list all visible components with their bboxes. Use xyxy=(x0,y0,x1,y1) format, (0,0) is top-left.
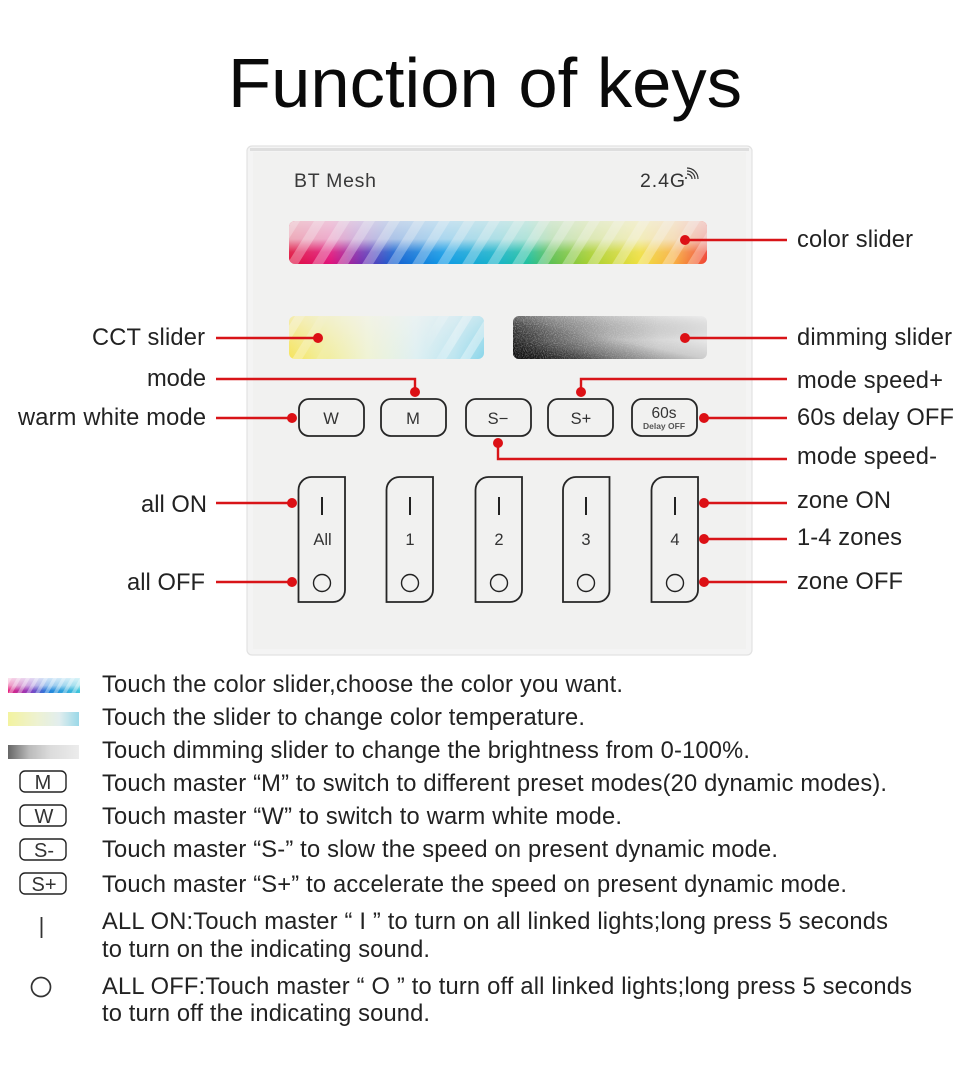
callout: CCT slider: CCT slider xyxy=(92,325,205,351)
legend: W key xyxy=(20,805,66,828)
zone key: 2 xyxy=(476,477,522,602)
legend: S+ key xyxy=(20,873,66,896)
callout: mode: mode xyxy=(147,366,206,392)
legend text: S+: Touch master “S+” to accelerate the speed on present dynamic mode. xyxy=(102,872,847,898)
legend: I symbol xyxy=(40,917,42,938)
legend: M key xyxy=(20,771,66,794)
callout: mode speed+: mode speed+ xyxy=(797,368,943,394)
legend: O symbol xyxy=(32,978,50,996)
callout: color slider: color slider xyxy=(797,227,913,253)
zone key: 4 xyxy=(652,477,698,602)
legend text: all off: to turn off the indicating sound. xyxy=(102,1001,430,1027)
legend: W key: W xyxy=(35,806,54,828)
legend: color slider swatch xyxy=(8,678,80,693)
zone key: 2: 2 xyxy=(494,531,504,549)
callout: 60s delay OFF xyxy=(699,405,954,431)
key: S-: S− xyxy=(488,410,508,428)
zone key: 3: 3 xyxy=(581,531,591,549)
callout: 60s delay OFF: 60s delay OFF xyxy=(797,405,954,431)
callout: 1-4 zones xyxy=(699,525,902,551)
callout: zone ON xyxy=(699,488,891,514)
zone key: 1: 1 xyxy=(405,531,415,549)
callout: mode speed-: mode speed- xyxy=(797,444,937,470)
legend: S- key xyxy=(20,839,66,862)
callout: 1-4 zones: 1-4 zones xyxy=(797,525,902,551)
legend text: all off: ALL OFF:Touch master “ O ” to turn off all linked lights;long press 5 seconds xyxy=(102,974,912,1000)
CCT slider xyxy=(289,316,484,359)
dimming slider xyxy=(513,316,707,359)
callout: dimming slider: dimming slider xyxy=(797,325,952,351)
callout: color slider xyxy=(680,227,913,253)
panel: wall controller xyxy=(247,146,752,655)
key: W xyxy=(299,399,364,436)
legend: S+ key: S+ xyxy=(31,874,57,896)
key: S+ xyxy=(548,399,613,436)
key: S+: S+ xyxy=(571,410,591,428)
zone key: 4: 4 xyxy=(670,531,680,549)
legend text: S-: Touch master “S-” to slow the speed on present dynamic mode. xyxy=(102,837,778,863)
zone key: 1 xyxy=(386,477,433,602)
callout: all ON xyxy=(141,492,297,518)
legend text: dimming: Touch dimming slider to change the brightness from 0-100%. xyxy=(102,738,750,764)
zone key: All xyxy=(298,477,345,602)
callout: zone ON: zone ON xyxy=(797,488,891,514)
key: S- xyxy=(466,399,531,436)
callout: mode speed- xyxy=(493,438,937,470)
key: W: W xyxy=(323,410,339,428)
key: 60s delay off xyxy=(632,399,697,436)
callout: CCT slider xyxy=(92,325,323,351)
callout: zone OFF: zone OFF xyxy=(797,569,903,595)
legend text: all off xyxy=(102,974,912,1027)
2.4G wireless label: 2.4G xyxy=(640,170,685,192)
title: Function of keys xyxy=(228,44,742,122)
zone key: All: All xyxy=(313,531,332,549)
brand text: BT Mesh xyxy=(294,170,376,192)
key: M: M xyxy=(406,410,420,428)
callout: all OFF: all OFF xyxy=(127,570,205,596)
legend: S- key: S- xyxy=(34,840,54,862)
callout: mode xyxy=(147,366,420,397)
callout: warm white mode xyxy=(17,405,297,431)
legend text: color slider: Touch the color slider,choose the color you want. xyxy=(102,672,623,698)
color slider xyxy=(289,221,707,264)
legend: CCT swatch xyxy=(8,712,79,726)
zone key: 3 xyxy=(563,477,610,602)
key: 60s delay off: Delay OFF xyxy=(643,421,685,431)
callout: zone OFF xyxy=(699,569,903,595)
legend text: all on: ALL ON:Touch master “ I ” to turn on all linked lights;long press 5 seconds xyxy=(102,909,888,935)
legend text: M: Touch master “M” to switch to different preset modes(20 dynamic modes). xyxy=(102,771,887,797)
callout: dimming slider xyxy=(680,325,952,351)
callout: all ON: all ON xyxy=(141,492,207,518)
callout: mode speed+ xyxy=(576,368,943,397)
key: 60s delay off: 60s xyxy=(652,405,677,422)
legend text: W: Touch master “W” to switch to warm white mode. xyxy=(102,804,622,830)
callout: warm white mode: warm white mode xyxy=(17,405,206,431)
legend text: all on: to turn on the indicating sound. xyxy=(102,937,430,963)
legend: M key: M xyxy=(35,772,51,794)
legend text: CCT: Touch the slider to change color temperature. xyxy=(102,705,585,731)
legend: dimming swatch xyxy=(8,745,79,759)
key: M xyxy=(381,399,446,436)
legend text: all on xyxy=(102,909,888,963)
callout: all OFF xyxy=(127,570,297,596)
